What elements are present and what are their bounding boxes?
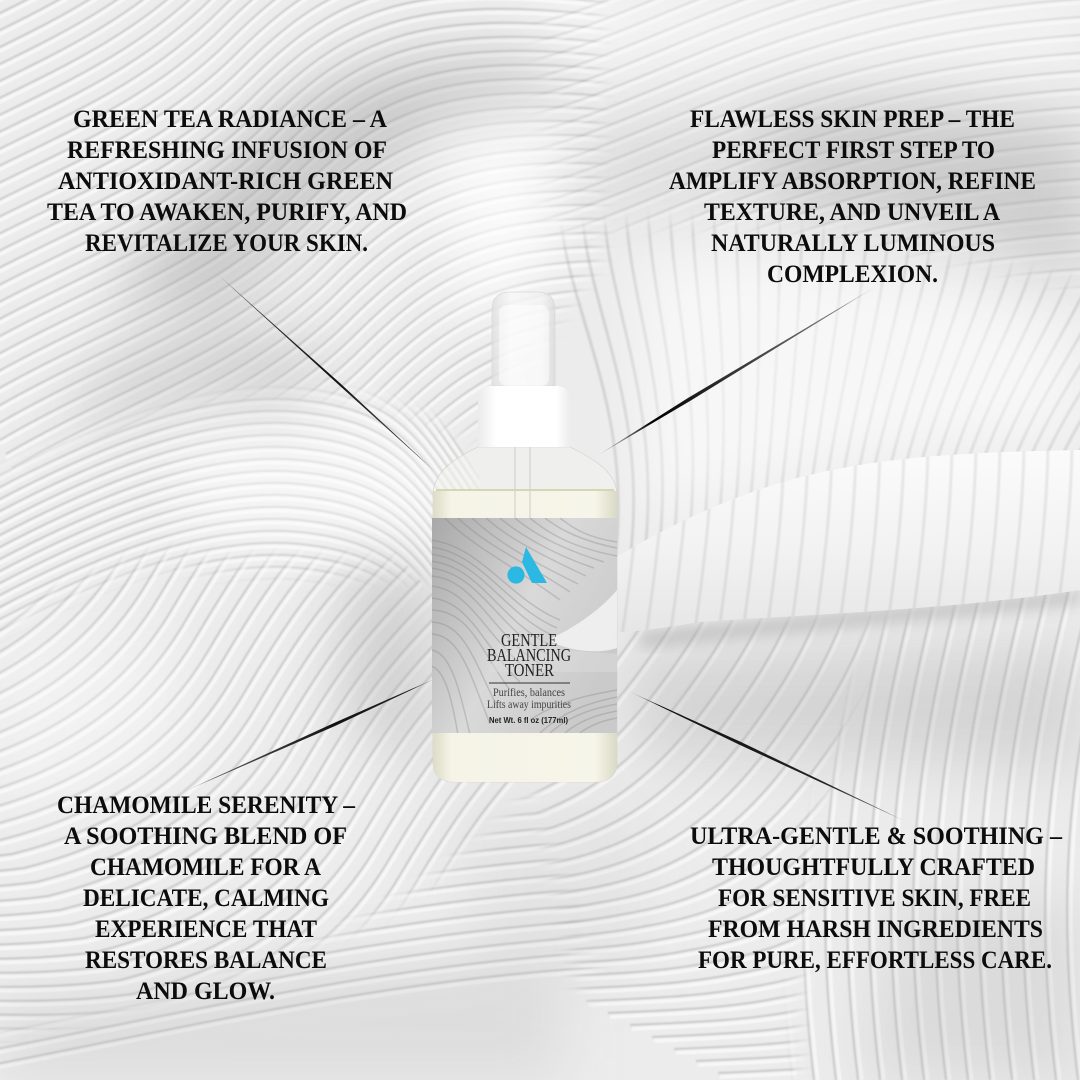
callout text: ultra-gentle and soothing: FROM HARSH INGREDIENTS bbox=[708, 916, 1043, 943]
label text: Lifts away impurities bbox=[487, 697, 571, 711]
callout line: bottom right bbox=[626, 690, 909, 823]
liquid bbox=[433, 491, 617, 782]
callout text: ultra-gentle and soothing: ULTRA-GENTLE & SOOTHING – bbox=[690, 823, 1062, 850]
callout text: green tea radiance: REFRESHING INFUSION OF bbox=[67, 137, 387, 164]
callout text: ultra-gentle and soothing: THOUGHTFULLY CRAFTED bbox=[712, 854, 1035, 881]
callout text: flawless skin prep: COMPLEXION. bbox=[767, 261, 938, 288]
callout line: top left bbox=[215, 272, 441, 477]
callout text: flawless skin prep: PERFECT FIRST STEP TO bbox=[712, 137, 995, 164]
label bbox=[430, 518, 617, 735]
callout text: green tea radiance: GREEN TEA RADIANCE – A bbox=[73, 106, 387, 133]
callout line: bottom left bbox=[183, 676, 441, 792]
label text: Net Wt. 6 fl oz (177ml) bbox=[489, 715, 568, 725]
callout text: chamomile serenity: RESTORES BALANCE bbox=[85, 947, 327, 974]
product bottle bbox=[430, 292, 617, 782]
pump overcap bbox=[492, 292, 555, 386]
callout text: green tea radiance bbox=[47, 106, 407, 257]
collar bbox=[478, 386, 570, 447]
callout text: chamomile serenity: EXPERIENCE THAT bbox=[95, 916, 317, 943]
callout text: chamomile serenity bbox=[57, 792, 355, 1005]
callout text: flawless skin prep: AMPLIFY ABSORPTION, REFINE bbox=[669, 168, 1036, 195]
dip tube bbox=[515, 447, 530, 518]
callout text: ultra-gentle and soothing bbox=[690, 823, 1062, 974]
callout text: chamomile serenity: A SOOTHING BLEND OF bbox=[64, 823, 347, 850]
callout text: green tea radiance: ANTIOXIDANT-RICH GREEN bbox=[58, 168, 393, 195]
callout line: top right bbox=[595, 284, 880, 457]
pump nozzle bbox=[499, 305, 549, 386]
callout text: ultra-gentle and soothing: FOR PURE, EFFORTLESS CARE. bbox=[698, 947, 1052, 974]
label text: GENTLE bbox=[501, 630, 557, 650]
ribs under the upper right ridge bbox=[560, 200, 1080, 560]
callout text: chamomile serenity: CHAMOMILE SERENITY – bbox=[57, 792, 355, 819]
label text: BALANCING bbox=[487, 645, 571, 665]
bottle body bbox=[433, 447, 617, 782]
label text: TONER bbox=[505, 660, 554, 680]
bright fold at right bbox=[612, 440, 1080, 650]
brand logo bbox=[507, 547, 547, 584]
callout text: flawless skin prep: TEXTURE, AND UNVEIL A bbox=[704, 199, 1000, 226]
callout text: flawless skin prep bbox=[669, 106, 1036, 288]
callout text: green tea radiance: TEA TO AWAKEN, PURIFY, AND bbox=[47, 199, 407, 226]
callout text: chamomile serenity: CHAMOMILE FOR A bbox=[90, 854, 321, 881]
callout text: flawless skin prep: FLAWLESS SKIN PREP – THE bbox=[690, 106, 1015, 133]
callout text: flawless skin prep: NATURALLY LUMINOUS bbox=[711, 230, 995, 257]
callout text: ultra-gentle and soothing: FOR SENSITIVE SKIN, FREE bbox=[718, 885, 1031, 912]
callout text: green tea radiance: REVITALIZE YOUR SKIN. bbox=[85, 230, 368, 257]
callout text: chamomile serenity: AND GLOW. bbox=[136, 978, 275, 1005]
callout text: chamomile serenity: DELICATE, CALMING bbox=[83, 885, 329, 912]
label text bbox=[487, 630, 571, 725]
label text: Purifies, balances bbox=[493, 685, 565, 699]
